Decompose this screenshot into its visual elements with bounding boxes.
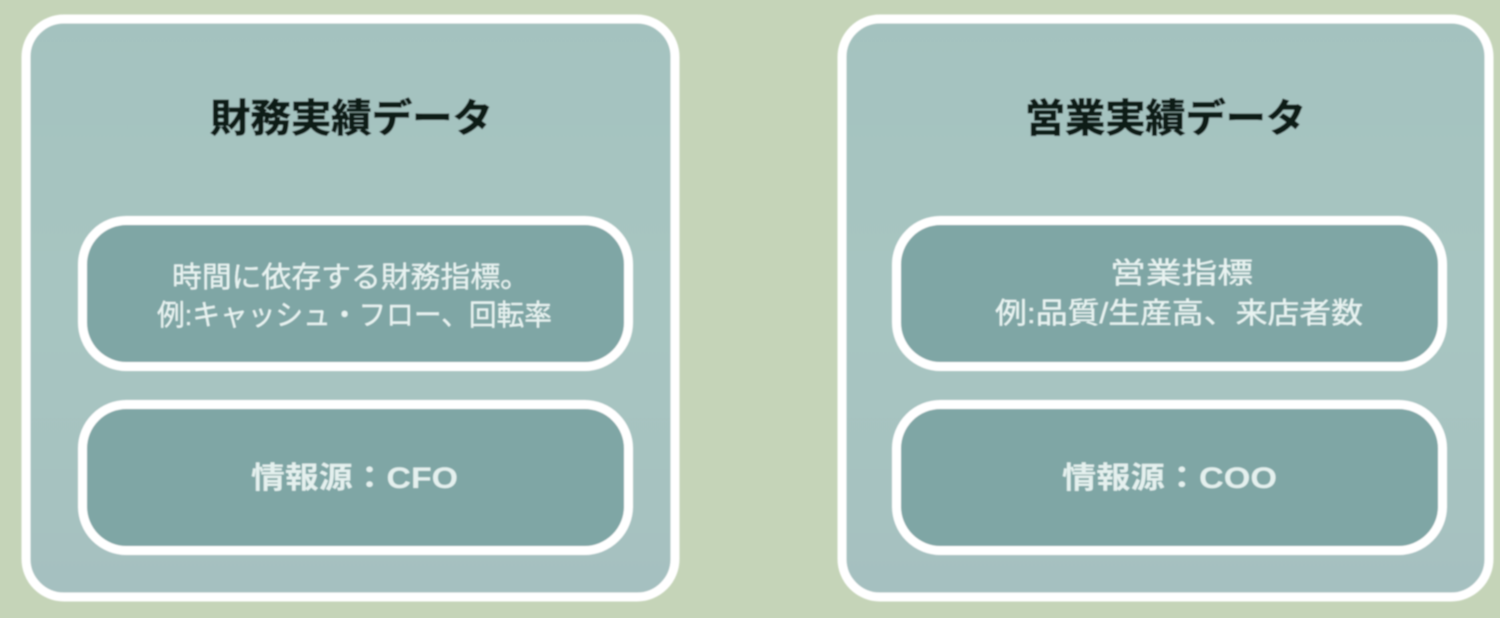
box: financial metrics: 時間に依存する財務指標。: [172, 261, 530, 294]
panel: financial performance data: [26, 19, 675, 597]
panel: operating performance data: [842, 19, 1489, 597]
box: financial metrics: [82, 220, 628, 366]
box: source COO: 情報源：COO: [1062, 462, 1277, 495]
heading: financial performance data: 財務実績データ: [210, 97, 493, 141]
box: source COO: [896, 404, 1442, 550]
box: source CFO: [82, 404, 628, 550]
box: operating metrics: [896, 220, 1442, 366]
box: financial metrics: 例:キャッシュ・フロー、回転率: [157, 299, 552, 332]
box: operating metrics: 例:品質/生産高、来店者数: [995, 297, 1363, 330]
box: operating metrics: 営業指標: [1110, 257, 1253, 290]
box: source CFO: 情報源：CFO: [251, 462, 458, 495]
heading: operating performance data: 営業実績データ: [1025, 97, 1306, 141]
